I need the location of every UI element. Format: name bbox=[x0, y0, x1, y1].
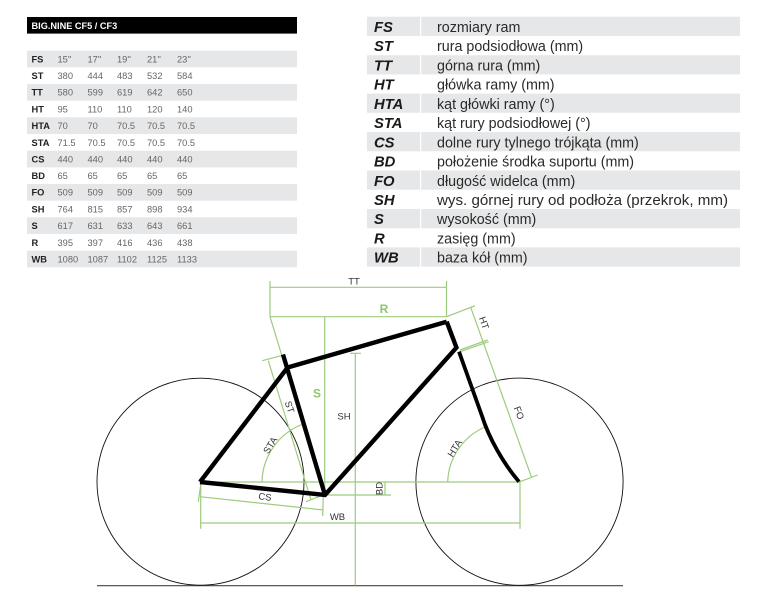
row BD bbox=[32, 171, 187, 181]
table title bar bbox=[27, 17, 297, 34]
legend HT: HT bbox=[374, 78, 396, 94]
row FS: 23'' bbox=[177, 54, 191, 64]
legend FS: FS bbox=[374, 20, 393, 36]
row SH: 934 bbox=[177, 204, 193, 214]
row WB: 1102 bbox=[117, 254, 137, 264]
row ST: 532 bbox=[147, 71, 163, 81]
row FS: 17'' bbox=[88, 54, 102, 64]
row HT: 120 bbox=[147, 104, 163, 114]
row S: S bbox=[32, 221, 38, 231]
row BD: BD bbox=[32, 171, 45, 181]
legend FS bbox=[374, 20, 520, 36]
row TT: 650 bbox=[177, 88, 193, 98]
row CS: 440 bbox=[58, 154, 73, 164]
row R: 397 bbox=[88, 238, 103, 248]
row BD: 65 bbox=[88, 171, 98, 181]
legend row stripes bbox=[367, 17, 740, 267]
table row stripes bbox=[27, 51, 297, 267]
row HTA: 70.5 bbox=[147, 121, 165, 131]
row S bbox=[32, 221, 193, 231]
row STA bbox=[32, 138, 195, 148]
label FO: FO bbox=[511, 405, 526, 421]
row HT bbox=[32, 104, 193, 114]
row TT: 599 bbox=[88, 88, 103, 98]
row SH: 764 bbox=[58, 204, 73, 214]
label HTA: HTA bbox=[446, 437, 465, 459]
label HT: HT bbox=[476, 315, 491, 331]
label S: S bbox=[313, 386, 321, 400]
legend R bbox=[374, 231, 516, 247]
row WB: WB bbox=[32, 254, 47, 264]
row S: 643 bbox=[147, 221, 163, 231]
green dimension lines bbox=[198, 281, 538, 586]
row TT: 580 bbox=[58, 88, 73, 98]
row SH: 815 bbox=[88, 204, 103, 214]
legend S: S bbox=[374, 212, 384, 228]
row FO: 509 bbox=[117, 188, 133, 198]
legend BD: położenie środka suportu (mm) bbox=[437, 154, 634, 170]
row ST: ST bbox=[32, 71, 44, 81]
label ST: ST bbox=[282, 400, 296, 415]
row S: 617 bbox=[58, 221, 73, 231]
row STA: 70.5 bbox=[177, 138, 195, 148]
row BD: 65 bbox=[177, 171, 187, 181]
row CS: 440 bbox=[117, 154, 133, 164]
legend TT: TT bbox=[374, 58, 394, 74]
legend ST: ST bbox=[374, 39, 395, 55]
row FS: FS bbox=[32, 54, 43, 64]
row ST: 380 bbox=[58, 71, 73, 81]
row S: 633 bbox=[117, 221, 133, 231]
row HTA: 70 bbox=[58, 121, 68, 131]
row ST: 483 bbox=[117, 71, 133, 81]
row R: 436 bbox=[147, 238, 163, 248]
legend TT bbox=[374, 58, 540, 74]
row TT bbox=[32, 88, 193, 98]
row HT: HT bbox=[32, 104, 44, 114]
label STA: STA bbox=[262, 435, 281, 456]
legend STA: kąt rury podsiodłowej (°) bbox=[437, 116, 591, 132]
row R: 438 bbox=[177, 238, 193, 248]
row HTA: HTA bbox=[32, 121, 50, 131]
row TT: TT bbox=[32, 88, 43, 98]
row STA: 70.5 bbox=[88, 138, 106, 148]
row HT: 95 bbox=[58, 104, 68, 114]
legend HTA: HTA bbox=[374, 97, 403, 113]
legend CS: CS bbox=[374, 135, 395, 151]
row BD: 65 bbox=[117, 171, 127, 181]
legend R: R bbox=[374, 231, 385, 247]
rear wheel bbox=[97, 378, 304, 585]
row STA: 70.5 bbox=[117, 138, 135, 148]
table title bar: BIG.NINE CF5 / CF3 bbox=[32, 21, 117, 31]
row TT: 619 bbox=[117, 88, 133, 98]
row ST bbox=[32, 71, 193, 81]
row FO: FO bbox=[32, 188, 44, 198]
row HTA: 70.5 bbox=[177, 121, 195, 131]
legend R: zasięg (mm) bbox=[437, 231, 516, 247]
row SH: SH bbox=[32, 204, 45, 214]
label CS: CS bbox=[258, 491, 272, 504]
row ST: 444 bbox=[88, 71, 103, 81]
row R: R bbox=[32, 238, 38, 248]
row HTA: 70 bbox=[88, 121, 98, 131]
legend SH: SH bbox=[374, 193, 395, 209]
row FO: 509 bbox=[58, 188, 73, 198]
row STA: 71.5 bbox=[58, 138, 76, 148]
row HTA: 70.5 bbox=[117, 121, 135, 131]
row S: 661 bbox=[177, 221, 193, 231]
row WB bbox=[32, 254, 197, 264]
legend ST bbox=[374, 39, 583, 55]
row S: 631 bbox=[88, 221, 103, 231]
bike geometry diagram bbox=[97, 276, 623, 586]
legend HTA: kąt główki ramy (°) bbox=[437, 97, 555, 113]
label WB: WB bbox=[330, 512, 345, 523]
legend FO: FO bbox=[374, 174, 395, 190]
label R: R bbox=[380, 302, 389, 316]
legend S: wysokość (mm) bbox=[436, 212, 536, 228]
row CS bbox=[32, 154, 193, 164]
row CS: 440 bbox=[147, 154, 163, 164]
row SH bbox=[32, 204, 193, 214]
legend HT: główka ramy (mm) bbox=[437, 78, 555, 94]
row CS: CS bbox=[32, 154, 44, 164]
ground line bbox=[97, 585, 623, 587]
row SH: 857 bbox=[117, 204, 133, 214]
row WB: 1133 bbox=[177, 254, 197, 264]
legend HTA bbox=[374, 97, 555, 113]
row R bbox=[32, 238, 193, 248]
geometry table bbox=[27, 17, 297, 267]
row R: 416 bbox=[117, 238, 133, 248]
row CS: 440 bbox=[177, 154, 193, 164]
row SH: 898 bbox=[147, 204, 163, 214]
legend S bbox=[374, 212, 536, 228]
row CS: 440 bbox=[88, 154, 103, 164]
row STA: STA bbox=[32, 138, 50, 148]
row STA: 70.5 bbox=[147, 138, 165, 148]
row HTA bbox=[32, 121, 195, 131]
legend ST: rura podsiodłowa (mm) bbox=[437, 39, 583, 55]
front wheel bbox=[416, 378, 623, 585]
row HT: 110 bbox=[117, 104, 132, 114]
legend table bbox=[367, 17, 740, 267]
legend CS: dolne rury tylnego trójkąta (mm) bbox=[437, 135, 639, 151]
legend BD: BD bbox=[374, 154, 396, 170]
row BD: 65 bbox=[147, 171, 157, 181]
label SH: SH bbox=[337, 412, 351, 422]
row WB: 1080 bbox=[58, 254, 78, 264]
row FS: 15'' bbox=[58, 54, 72, 64]
row TT: 642 bbox=[147, 88, 163, 98]
row BD: 65 bbox=[58, 171, 68, 181]
row FO bbox=[32, 188, 193, 198]
row FS: 21'' bbox=[147, 54, 161, 64]
row WB: 1087 bbox=[88, 254, 108, 264]
legend HT bbox=[374, 78, 555, 94]
row HT: 140 bbox=[177, 104, 193, 114]
row ST: 584 bbox=[177, 71, 193, 81]
row WB: 1125 bbox=[147, 254, 167, 264]
row FO: 509 bbox=[88, 188, 103, 198]
legend WB: baza kół (mm) bbox=[437, 251, 528, 267]
legend FO: długość widelca (mm) bbox=[437, 174, 575, 190]
row R: 395 bbox=[58, 238, 73, 248]
legend SH: wys. górnej rury od podłoża (przekrok, mm) bbox=[436, 193, 728, 209]
legend FO bbox=[374, 174, 575, 190]
legend TT: górna rura (mm) bbox=[437, 58, 540, 74]
row FO: 509 bbox=[177, 188, 193, 198]
legend STA: STA bbox=[374, 116, 402, 132]
bike frame bbox=[200, 322, 519, 495]
row FS bbox=[32, 54, 191, 64]
label BD: BD bbox=[374, 482, 386, 495]
legend FS: rozmiary ram bbox=[437, 20, 520, 36]
row FO: 509 bbox=[147, 188, 163, 198]
legend WB bbox=[374, 251, 528, 267]
label TT: TT bbox=[348, 276, 360, 288]
legend WB: WB bbox=[374, 251, 399, 267]
row HT: 110 bbox=[88, 104, 102, 114]
row FS: 19'' bbox=[117, 54, 131, 64]
